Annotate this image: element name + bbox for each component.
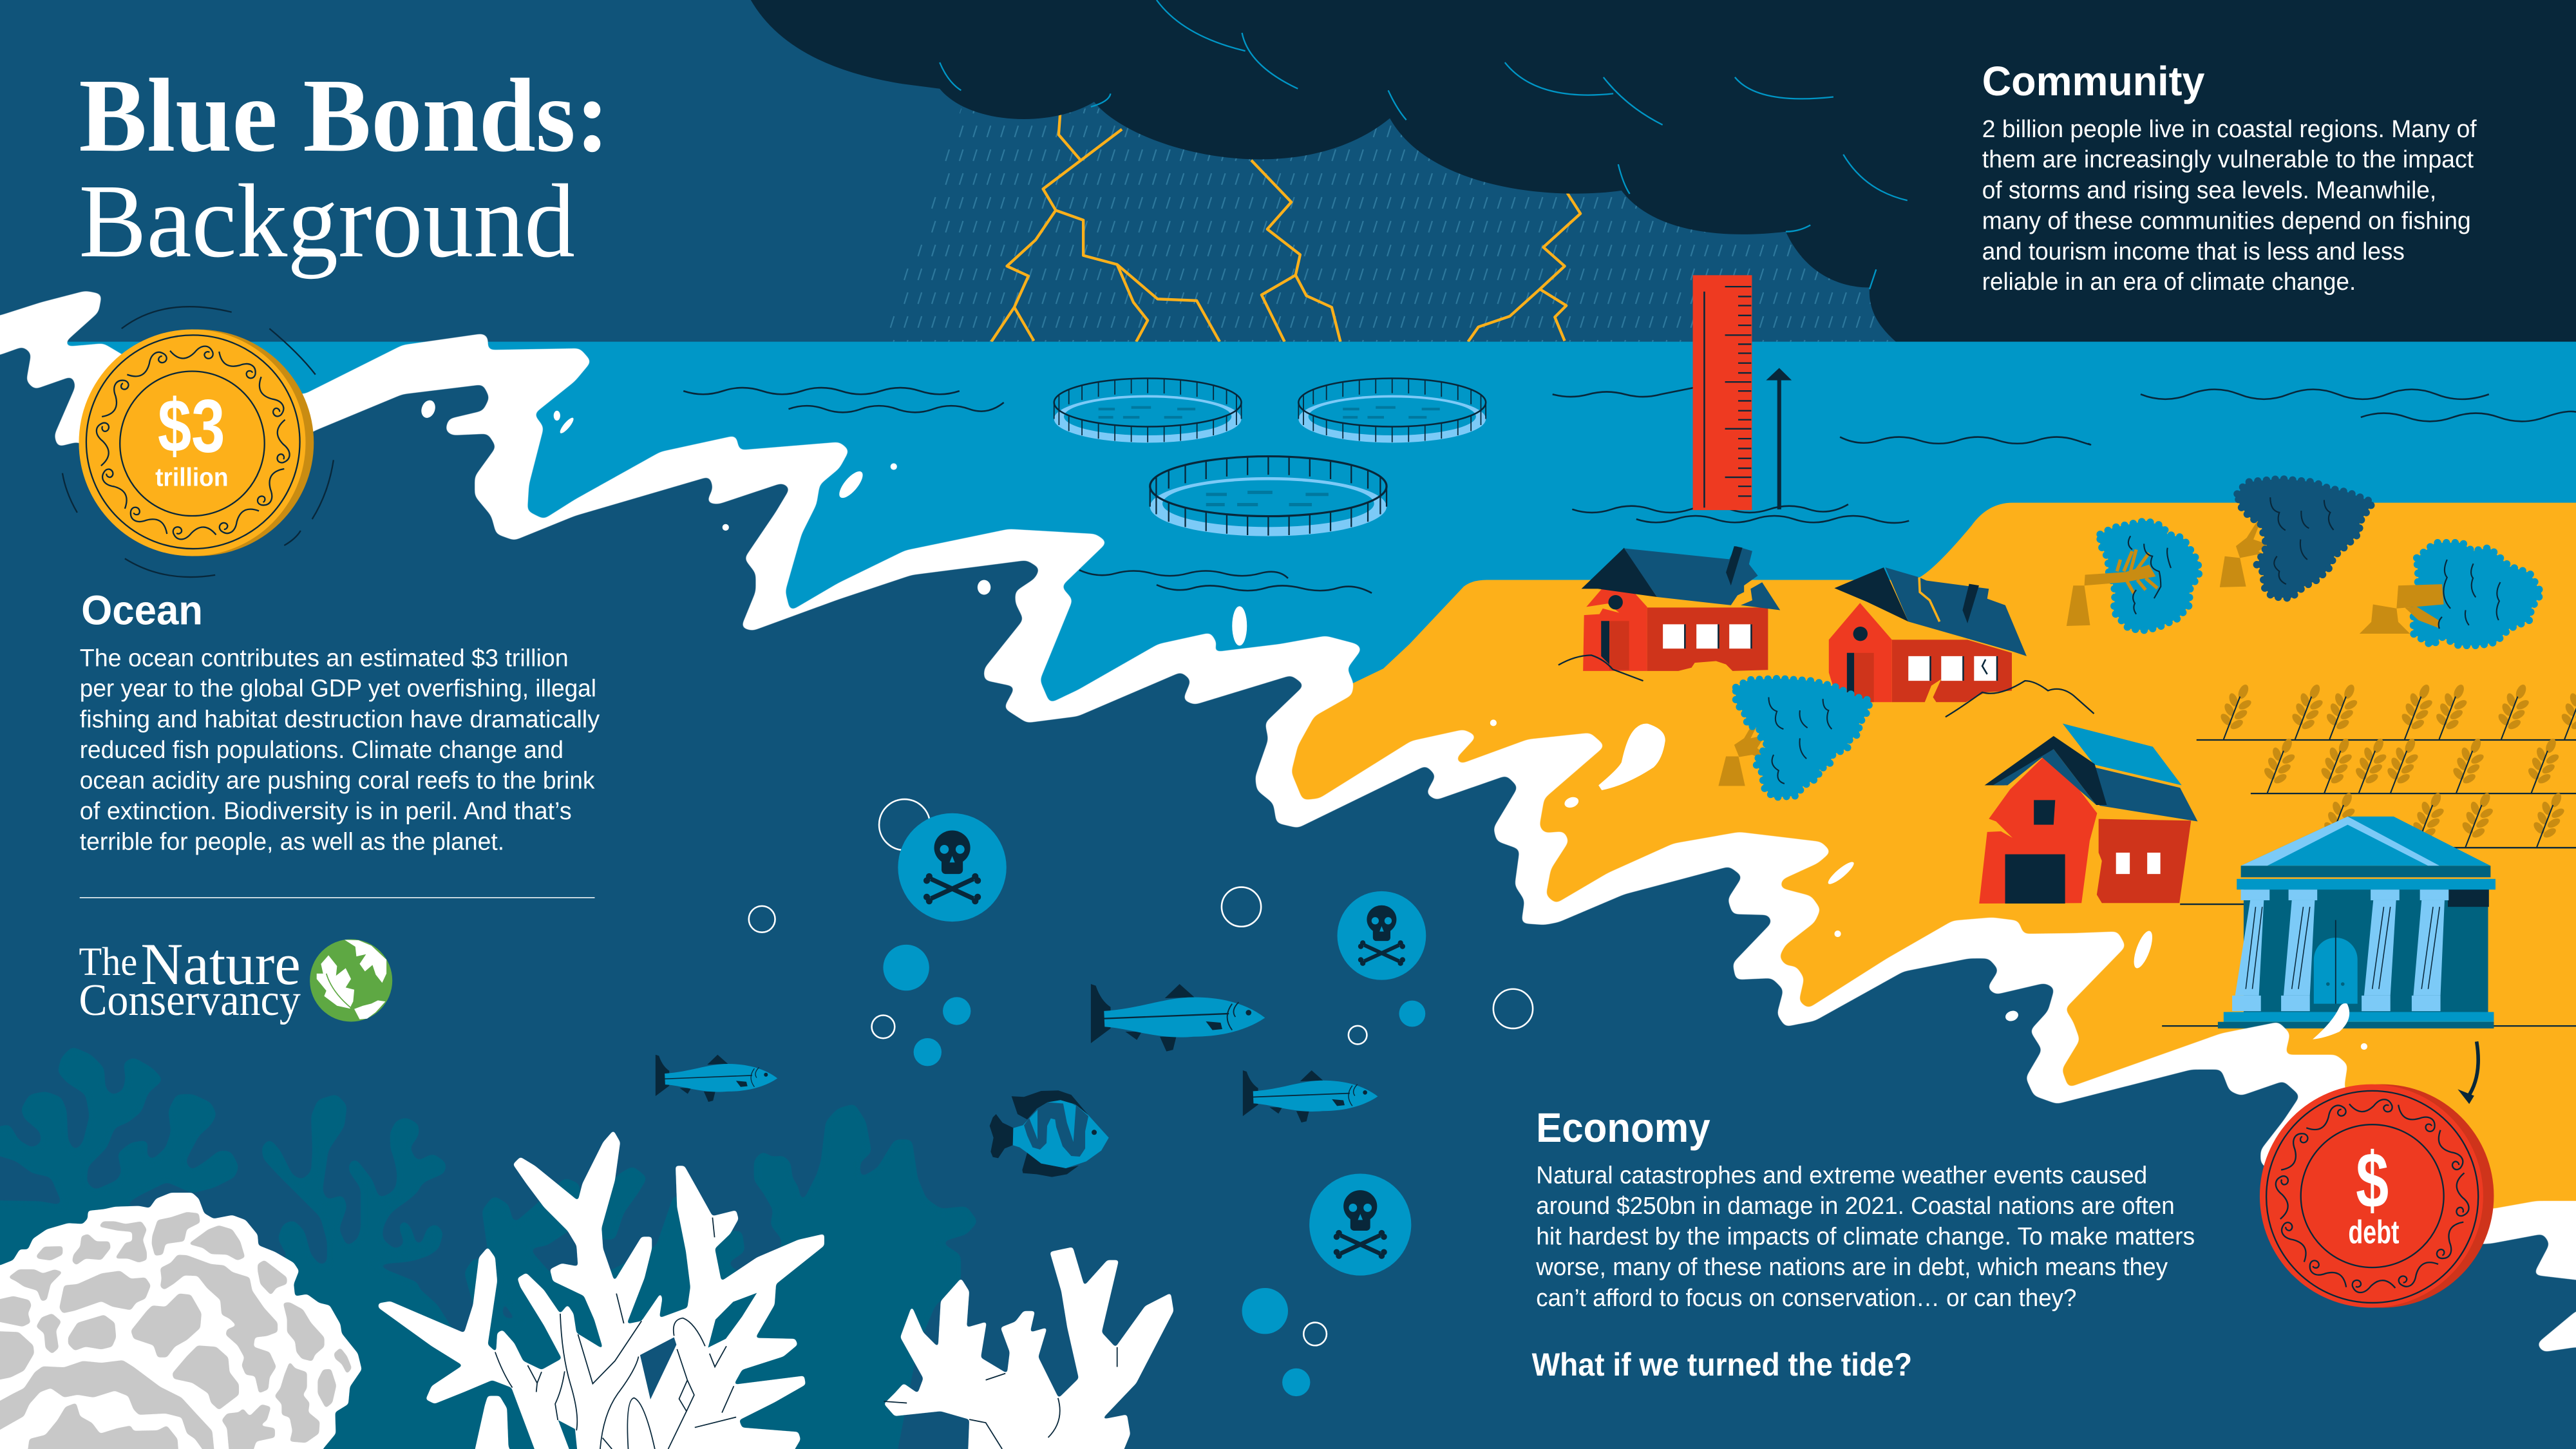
logo: The Nature Conservancy: Nature (140, 931, 301, 997)
coin ornament (97, 346, 290, 539)
wheat field (2162, 683, 2576, 1026)
logo: The Nature Conservancy: The (79, 939, 137, 984)
callout: What if we turned the tide?: What if we turned the tide? (1532, 1347, 1912, 1383)
bank building (2218, 817, 2496, 1028)
text block: Ocean: per year to the global GDP yet overfishing, illegal (80, 675, 596, 703)
tree four (1718, 679, 1871, 797)
arrow: bank to debt (2458, 1041, 2478, 1104)
tree three (2360, 543, 2541, 645)
sinking three trillion dollar coin (62, 307, 334, 577)
white staghorn coral (379, 1130, 824, 1449)
barn (1979, 723, 2197, 904)
sinking debt coin (2260, 1084, 2494, 1308)
text block: Community: of storms and rising sea levels. Meanwhile, (1982, 176, 2436, 204)
rain hatching (890, 108, 1888, 341)
fish: salmon small (656, 1055, 777, 1102)
title: Blue Bonds: (79, 58, 609, 174)
fish: angelfish (990, 1090, 1109, 1177)
text block: Economy (1535, 1162, 2195, 1312)
title (79, 58, 609, 279)
storm cloud (751, 0, 2576, 342)
text block: Economy: around $250bn in damage in 2021. Coastal nations are often (1536, 1192, 2175, 1220)
house two (1829, 567, 2094, 717)
skull icon: pollution one (898, 813, 1007, 922)
coin body (82, 329, 314, 556)
heading: Community: Community (1982, 58, 2205, 104)
heading: Ocean: Ocean (81, 587, 203, 633)
text block: Community: 2 billion people live in coastal regions. Many of (1982, 115, 2477, 143)
logo: The Nature Conservancy: Conservancy (79, 975, 301, 1025)
trees bent by storm, upper right (2067, 478, 2541, 645)
coin value: $3 (158, 384, 225, 468)
tree two (2220, 478, 2373, 598)
skull icon: pollution three (1309, 1173, 1411, 1276)
water ripples (683, 388, 2576, 593)
debt coin symbol: $ (2356, 1136, 2389, 1224)
text block: Ocean: fishing and habitat destruction have dramatically (80, 706, 600, 734)
text block: Ocean (80, 644, 600, 855)
lightning bolts (991, 111, 1580, 342)
text block: Ocean: of extinction. Biodiversity is in peril. And that’s (80, 797, 572, 825)
text block: Economy: hit hardest by the impacts of climate change. To make matters (1536, 1223, 2195, 1251)
text block: Community: and tourism income that is less and less (1982, 238, 2405, 265)
text block: Economy: Natural catastrophes and extreme weather events caused (1536, 1162, 2147, 1189)
coin unit: trillion (155, 463, 229, 491)
text block: Ocean: The ocean contributes an estimated $3 trillion (80, 644, 569, 672)
skull icon: pollution two (1338, 891, 1426, 980)
deep ocean foreground (0, 346, 2576, 1449)
brain coral (0, 1193, 362, 1449)
text block: Community: many of these communities depend on fishing (1982, 207, 2471, 234)
text block: Community: them are increasingly vulnerable to the impact (1982, 146, 2474, 173)
coastal land (1282, 503, 2576, 1363)
background coral silhouettes (0, 1046, 978, 1449)
house one (1558, 546, 1780, 681)
text block: Ocean: ocean acidity are pushing coral reefs to the brink (80, 766, 595, 794)
foam splashes (419, 399, 2576, 1354)
debt coin label: debt (2348, 1213, 2400, 1250)
fish farm pens (1054, 379, 1486, 536)
tide gauge (1693, 275, 1752, 510)
text block: Ocean: terrible for people, as well as the planet. (80, 828, 504, 855)
heading: Economy: Economy (1536, 1104, 1710, 1151)
text block: Community: reliable in an era of climate change. (1982, 268, 2356, 296)
text block: Community (1982, 115, 2477, 296)
tree one (2067, 521, 2199, 630)
title: Background (79, 164, 575, 279)
white breaking wave foam (0, 291, 2576, 1449)
text block: Ocean: reduced fish populations. Climate change and (80, 736, 564, 764)
fish: salmon large (1091, 984, 1265, 1052)
white coral right (884, 1247, 1173, 1449)
text block: Economy: can’t afford to focus on conservation… or can they? (1536, 1284, 2076, 1312)
text block: Economy: worse, many of these nations are in debt, which means they (1535, 1253, 2168, 1281)
bubbles (749, 799, 1533, 1396)
ocean surface water (0, 342, 2576, 884)
debt coin ornament (2276, 1099, 2469, 1293)
coin motion lines (62, 307, 334, 577)
logo: The Nature Conservancy (79, 931, 392, 1025)
arrow: rising sea level (1766, 368, 1792, 509)
fish: salmon medium (1243, 1070, 1378, 1122)
